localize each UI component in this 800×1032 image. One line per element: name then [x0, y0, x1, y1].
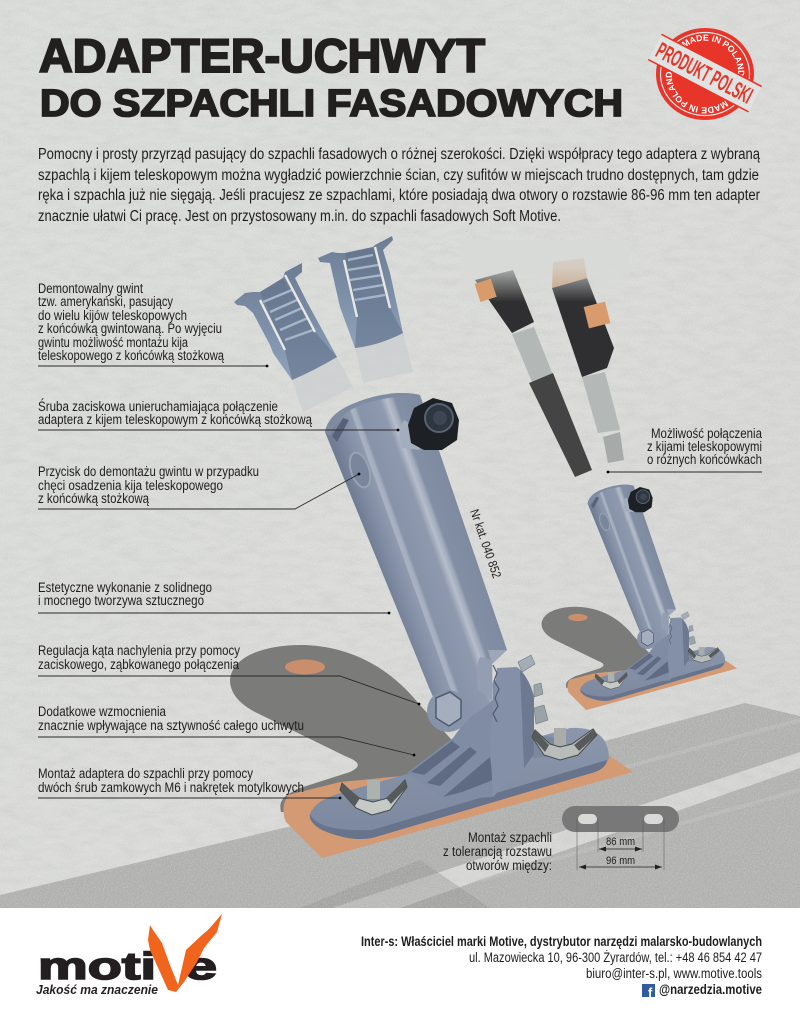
label: release button: chęci osadzenia kija teleskopowego [38, 478, 223, 493]
label: plastic [38, 580, 390, 614]
stamp: Produkt Polski: MADE IN POLAND [682, 34, 744, 76]
label: reinforcements: Dodatkowe wzmocnienia [38, 704, 166, 719]
label: removable thread: teleskopowego z końcówką stożkową [38, 348, 224, 363]
label: tilt angle: zaciskowego, ząbkowanego połączenia [38, 657, 239, 672]
catalog number: Nr kat. 040 852 [467, 507, 504, 580]
contact details: f [648, 985, 653, 1000]
diagram: hole spacing [562, 806, 679, 870]
label: reinforcements [38, 704, 415, 756]
large adapter [230, 393, 633, 858]
diagram: hole spacing: 96 mm [606, 855, 635, 867]
label: clamping screw: Śruba zaciskowa unieruchamiająca połączenie [38, 399, 278, 414]
label: pole compatibility: o różnych końcówkach [647, 452, 762, 467]
label: release button: Przycisk do demontażu gwintu w przypadku [38, 464, 259, 479]
label: removable thread: Demontowalny gwint [38, 281, 143, 296]
label: pole compatibility [607, 426, 762, 473]
label: removable thread: tzw. amerykański, pasujący [38, 294, 173, 309]
label: hole spacing: z tolerancją rozstawu [443, 844, 552, 859]
stamp: Produkt Polski: MADE IN POLAND [666, 72, 728, 114]
logo: Motive: Jakość ma znaczenie [36, 982, 158, 997]
label: hole spacing: otworów między: [466, 858, 552, 873]
label: tilt angle: Regulacja kąta nachylenia przy pomocy [38, 643, 240, 658]
contact details [361, 934, 762, 1000]
stamp: Produkt Polski [648, 28, 762, 120]
label: mounting: Montaż adaptera do szpachli przy pomocy [38, 766, 253, 781]
label: release button: z końcówką stożkową [38, 491, 149, 506]
label: removable thread [38, 281, 268, 367]
label: release button [38, 464, 360, 509]
thread inserts [234, 236, 413, 412]
label: removable thread: z końcówką gwintowaną. Po wyjęciu [38, 321, 222, 336]
label: pole compatibility: Możliwość połączenia [651, 426, 762, 441]
label: plastic: i mocnego tworzywa sztucznego [38, 593, 204, 608]
title [39, 29, 623, 125]
label: hole spacing: Montaż szpachli [468, 830, 552, 845]
label: reinforcements: znacznie wpływające na sztywność całego uchwytu [38, 718, 304, 733]
telescopic pole ends [460, 240, 630, 477]
title: ADAPTER-UCHWYT [39, 29, 485, 82]
label: hole spacing [443, 830, 552, 873]
label: removable thread: gwintu możliwość montażu kija [38, 335, 188, 350]
title: DO SZPACHLI FASADOWYCH [40, 83, 623, 125]
label: clamping screw [38, 399, 399, 431]
label: plastic: Estetyczne wykonanie z solidnego [38, 580, 212, 595]
label: mounting [38, 766, 341, 799]
logo: Motive [36, 914, 222, 997]
label: mounting: dwóch śrub zamkowych M6 i nakrętek motylkowych [38, 780, 304, 795]
label: tilt angle [38, 643, 420, 705]
intro paragraph: znacznie ułatwi Ci pracę. Jest on przystosowany m.in. do szpachli fasadowych Soft Motive. [38, 208, 561, 225]
logo: Motive: moti [38, 946, 156, 988]
label: clamping screw: adaptera z kijem teleskopowym z końcówką stożkową [38, 412, 312, 427]
label: pole compatibility: z kijami teleskopowymi [647, 439, 762, 454]
diagram: hole spacing: 86 mm [606, 836, 635, 848]
small adapter [542, 485, 737, 710]
intro paragraph [38, 146, 760, 225]
contact details: @narzedzia.motive [659, 982, 762, 997]
logo: Motive: e [184, 946, 217, 988]
contact details: biuro@inter-s.pl, www.motive.tools [586, 966, 762, 981]
label: removable thread: do wielu kijów teleskopowych [38, 308, 187, 323]
footer panel [0, 908, 800, 1032]
